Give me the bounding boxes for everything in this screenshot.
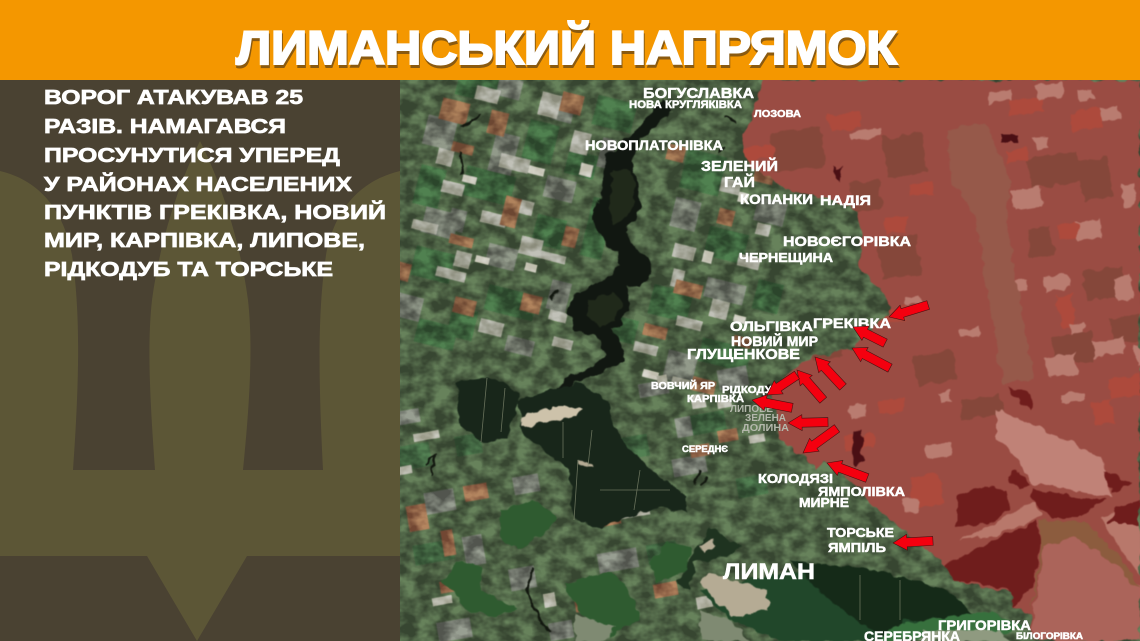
arrow [763,368,801,402]
forests [457,377,520,443]
label: ЯМПІЛЬ [828,540,886,555]
line: ПУНКТІВ ГРЕКІВКА, НОВИЙ [44,200,386,224]
label: city: ЛИМАН [723,559,815,584]
arrow [849,320,889,350]
label: НОВОПЛАТОНІВКА [585,137,723,153]
label: ЗЕЛЕНИЙ [701,157,778,175]
panel background [0,80,400,641]
noise [400,80,1140,641]
water: reservoir [555,100,672,390]
label: ЛОЗОВА [754,109,801,120]
label: НОВА КРУГЛЯКІВКА [629,99,742,111]
label: НАДІЯ [820,192,871,208]
Russian-held territory in red [740,75,1140,641]
line: ВОРОГ АТАКУВАВ 25 [44,87,303,109]
title [236,21,898,77]
arrow [809,352,849,392]
label: КАРПІВКА [687,394,744,405]
label: РІДКОДУБ [722,385,780,396]
label: ВОВЧИЙ ЯР [651,379,715,392]
header bar [0,0,1140,80]
creeks [425,114,768,633]
firebreaks [481,378,900,620]
label: ГЛУЩЕНКОВЕ [687,346,800,363]
label: БОГУСЛАВКА [643,85,754,102]
arrow [791,365,829,405]
label: КОПАНКИ [740,191,813,207]
arrow [893,533,933,551]
arrow [798,422,842,459]
arrow [750,392,794,416]
arrow [824,456,870,486]
line: МИР, КАРПІВКА, ЛИПОВЕ, [44,230,365,252]
label: ГАЙ [724,173,755,191]
arrow [788,414,828,431]
attack arrows [750,297,933,551]
line: У РАЙОНАХ НАСЕЛЕНИХ [44,172,353,196]
label: БІЛОГОРІВКА [1016,631,1084,641]
label: ДОЛИНА [742,423,789,434]
arrow [887,297,931,325]
label: НОВИЙ МИР [731,332,818,349]
label: МИРНЕ [799,495,849,510]
label: ГРИГОРІВКА [938,617,1031,633]
arrow [848,341,894,375]
body text [44,87,386,281]
label: ЛИПОВЕ [730,404,773,415]
label: ЯМПОЛІВКА [818,484,906,499]
label: ЧЕРНЕЩИНА [739,250,834,265]
label: ГРЕКІВКА [813,315,891,331]
place name labels [585,85,1084,641]
label: ОЛЬГІВКА [730,318,813,334]
title shadow: ЛИМАНСЬКИЙ НАПРЯМОК [237,24,898,77]
label: ТОРСЬКЕ [827,525,894,540]
line: ПРОСУНУТИСЯ УПЕРЕД [44,145,340,167]
left text panel [0,87,400,640]
map panel [400,80,1140,641]
label: СЕРЕДНЄ [682,444,729,454]
line: РАЗІВ. НАМАГАВСЯ [44,116,286,138]
label: КОЛОДЯЗІ [758,471,833,486]
satellite terrain [400,80,1140,641]
line: РІДКОДУБ ТА ТОРСЬКЕ [44,259,333,281]
faded labels [730,404,789,434]
trident emblem [0,141,400,641]
title text: ЛИМАНСЬКИЙ НАПРЯМОК [236,21,897,74]
label: ЗЕЛЕНА [745,413,786,424]
label: НОВОЄГОРІВКА [783,233,911,249]
